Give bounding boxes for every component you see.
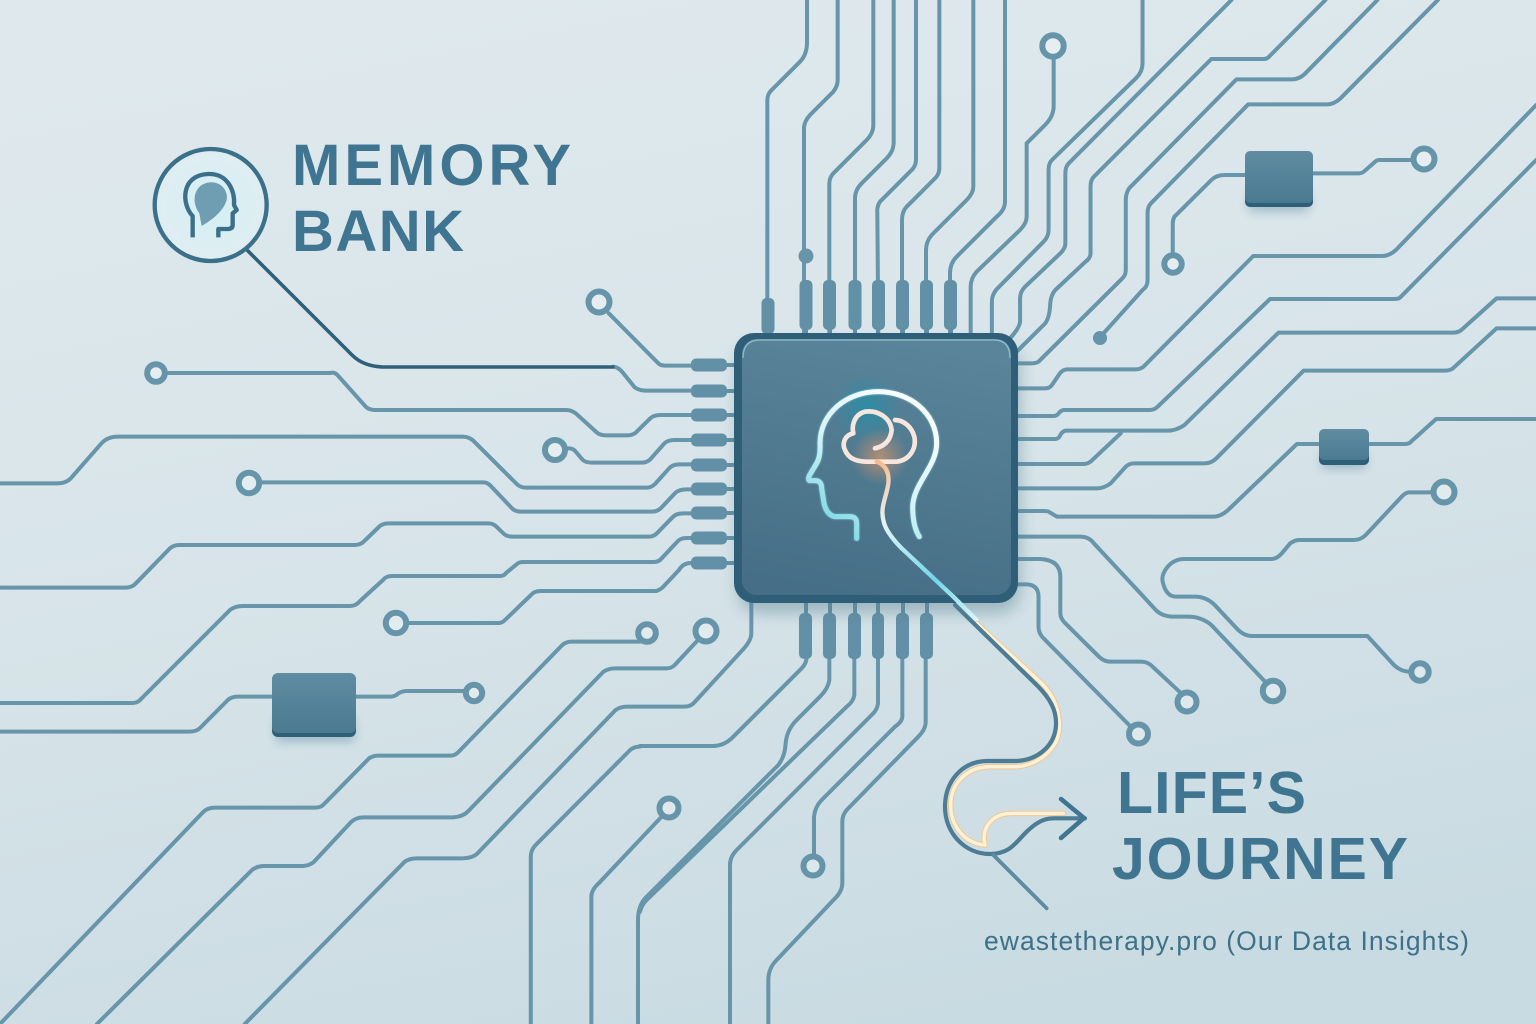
title: memory bank: BANK (292, 199, 464, 264)
chip pins (691, 280, 957, 659)
title: life's journey: LIFE’S (1117, 760, 1306, 826)
circuit traces: bottom (638, 657, 926, 1024)
small component: upper right (1245, 151, 1313, 212)
title: memory bank: MEMORY (292, 133, 571, 198)
circuit traces: joined left runs (0, 538, 697, 703)
icon: glowing head with cloud (809, 373, 977, 620)
small component: lower left (272, 673, 356, 742)
solder dots (798, 248, 1107, 345)
circuit traces: lower left (0, 583, 751, 1024)
circuit traces: right (992, 0, 1536, 725)
memory bank connector line (247, 250, 613, 367)
life's journey path with glow and arrow (945, 605, 1085, 908)
title: life's journey: JOURNEY (1112, 826, 1408, 892)
icon: memory bank head in ring (155, 149, 267, 261)
small component: right (1319, 429, 1369, 469)
arrow head (1061, 799, 1084, 838)
circuit traces: left (0, 313, 694, 588)
source attribution: ewastetherapy.pro (Our Data Insights) (984, 926, 1469, 956)
title: life's journey (1112, 760, 1408, 892)
central processor chip (734, 333, 1020, 620)
circuit traces: top (767, 0, 1054, 333)
title: memory bank (292, 133, 571, 264)
terminal rings (147, 35, 1455, 876)
